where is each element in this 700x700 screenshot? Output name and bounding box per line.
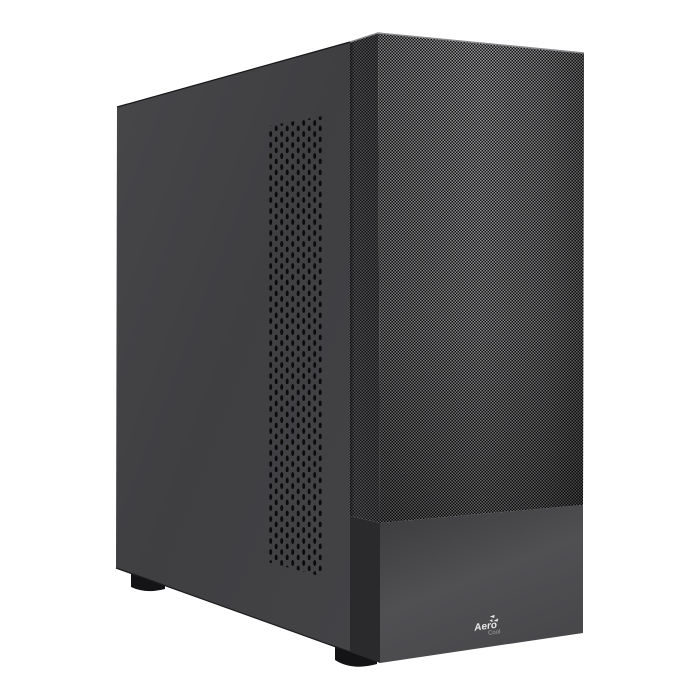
- side panel top edge: [117, 42, 350, 107]
- mesh horizontal shading: [378, 33, 584, 523]
- corner strip shading: [350, 33, 380, 523]
- logo: Aero Cool: [472, 614, 501, 639]
- panel: front face: [350, 33, 584, 663]
- icon: right front foot: [335, 646, 377, 667]
- panel: side panel: [116, 42, 351, 652]
- logo word Cool: Cool: [488, 629, 501, 637]
- icon: left rear foot: [131, 570, 165, 591]
- front base plate: [380, 505, 583, 663]
- side panel bottom edge: [116, 568, 350, 652]
- side ventilation perforations: [268, 116, 323, 577]
- front mesh panel: [378, 33, 584, 523]
- side panel surface: [116, 42, 351, 652]
- logo word Aero: Aero: [473, 620, 498, 634]
- front base corner: [350, 516, 380, 663]
- top edge highlight: [350, 33, 584, 53]
- front corner mesh strip: [350, 33, 380, 523]
- mesh vertical shading: [378, 33, 584, 523]
- logo leaf mark: [489, 614, 499, 623]
